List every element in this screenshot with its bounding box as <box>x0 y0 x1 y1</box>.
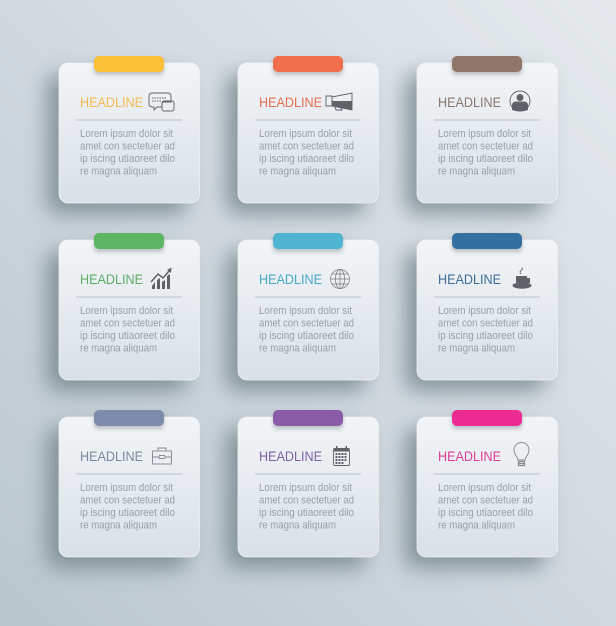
icon: coffee cup <box>512 268 532 289</box>
panel: card yellow <box>59 56 200 203</box>
body text: ip iscing utiaoreet dilo <box>438 153 533 165</box>
body text: re magna aliquam <box>259 166 336 178</box>
heading: HEADLINE <box>80 271 143 287</box>
tab <box>94 56 164 72</box>
body text: Lorem ipsum dolor sit <box>438 305 531 317</box>
body text: ip iscing utiaoreet dilo <box>80 330 175 342</box>
body text: ip iscing utiaoreet dilo <box>259 330 354 342</box>
body text: Lorem ipsum dolor sit <box>438 128 531 140</box>
panel: card blue <box>417 233 558 380</box>
body text: re magna aliquam <box>80 166 157 178</box>
body text: re magna aliquam <box>438 342 515 354</box>
body text: re magna aliquam <box>80 520 157 532</box>
body text: Lorem ipsum dolor sit <box>259 128 352 140</box>
icon: globe <box>330 270 350 288</box>
panel: card cyan <box>238 233 378 380</box>
body text: amet con sectetuer ad <box>438 140 533 152</box>
card shadows <box>47 74 545 568</box>
body text: re magna aliquam <box>259 520 336 532</box>
body text: Lorem ipsum dolor sit <box>80 305 173 317</box>
panel: card orange <box>238 56 378 203</box>
tab <box>452 56 522 72</box>
body text: ip iscing utiaoreet dilo <box>259 507 354 519</box>
body text: Lorem ipsum dolor sit <box>80 128 173 140</box>
heading: HEADLINE <box>438 448 501 464</box>
heading: HEADLINE <box>80 94 143 110</box>
icon: calendar <box>334 446 350 466</box>
body text: Lorem ipsum dolor sit <box>259 305 352 317</box>
body text: amet con sectetuer ad <box>259 494 354 506</box>
body text: Lorem ipsum dolor sit <box>80 482 173 494</box>
tab <box>94 233 164 249</box>
body text: re magna aliquam <box>438 520 515 532</box>
body text: ip iscing utiaoreet dilo <box>438 330 533 342</box>
body text: amet con sectetuer ad <box>80 318 175 330</box>
body text: amet con sectetuer ad <box>259 318 354 330</box>
tab <box>94 410 164 426</box>
body text: amet con sectetuer ad <box>80 140 175 152</box>
tab <box>273 233 343 249</box>
icon: light bulb <box>514 442 529 466</box>
heading: HEADLINE <box>438 94 501 110</box>
panel: card slate <box>59 410 200 557</box>
heading: HEADLINE <box>259 271 322 287</box>
body text: ip iscing utiaoreet dilo <box>80 507 175 519</box>
icon: growth chart <box>151 268 172 289</box>
body text: amet con sectetuer ad <box>259 140 354 152</box>
panel: card green <box>59 233 200 380</box>
heading: HEADLINE <box>259 94 322 110</box>
panel: card purple <box>238 410 378 557</box>
panel: card pink <box>417 410 558 557</box>
icon: briefcase <box>152 448 172 464</box>
body text: Lorem ipsum dolor sit <box>438 482 531 494</box>
tab <box>273 56 343 72</box>
icon: chat bubbles <box>149 93 174 111</box>
body text: re magna aliquam <box>80 342 157 354</box>
heading: HEADLINE <box>438 271 501 287</box>
icon: megaphone <box>326 93 352 110</box>
body text: ip iscing utiaoreet dilo <box>80 153 175 165</box>
tab <box>452 233 522 249</box>
panel: card brown <box>417 56 558 203</box>
body text: re magna aliquam <box>438 166 515 178</box>
body text: Lorem ipsum dolor sit <box>259 482 352 494</box>
body text: re magna aliquam <box>259 342 336 354</box>
body text: ip iscing utiaoreet dilo <box>259 153 354 165</box>
body text: ip iscing utiaoreet dilo <box>438 507 533 519</box>
heading: HEADLINE <box>259 448 322 464</box>
tab <box>452 410 522 426</box>
body text: amet con sectetuer ad <box>80 494 175 506</box>
icon: businessman <box>510 91 530 112</box>
body text: amet con sectetuer ad <box>438 318 533 330</box>
tab <box>273 410 343 426</box>
heading: HEADLINE <box>80 448 143 464</box>
body text: amet con sectetuer ad <box>438 494 533 506</box>
